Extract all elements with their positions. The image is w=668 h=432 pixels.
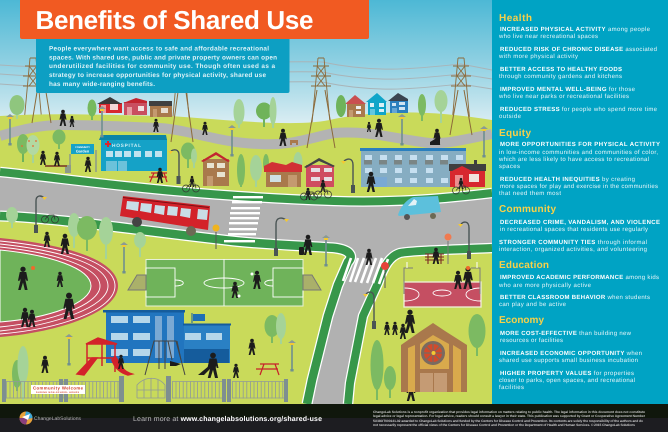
benefits: equity bbox=[498, 128, 660, 197]
community garden sign bbox=[45, 144, 96, 173]
benefits: health bbox=[498, 13, 658, 120]
benefits: economy: INCREASED ECONOMIC OPPORTUNITY when bbox=[500, 350, 642, 357]
benefits: economy: closer to parks, open spaces, and recreational bbox=[499, 377, 635, 384]
power lines and pylons bbox=[0, 58, 492, 138]
community welcome sign: DURING NON-SCHOOL HOURS bbox=[36, 391, 80, 394]
benefits: health: through community gardens and kitchens bbox=[499, 73, 622, 80]
benefits: equity: more spaces for play and exercise in the communities bbox=[500, 183, 658, 190]
benefits: economy: shared use supports small business incubation bbox=[499, 357, 638, 364]
fine print bbox=[373, 410, 646, 427]
community garden sign: Garden bbox=[76, 150, 90, 154]
benefits: economy: resources or facilities bbox=[500, 337, 563, 344]
website call to action: Learn more at www.changelabsolutions.org/shared-use bbox=[133, 415, 322, 423]
running track and field bbox=[0, 238, 118, 337]
benefits: education: can play and be active bbox=[499, 301, 567, 308]
house: brown with red roof bbox=[264, 162, 302, 187]
house: blue bbox=[388, 93, 408, 113]
walking path on the hill bbox=[0, 125, 492, 144]
balls and dog bbox=[31, 140, 470, 298]
picnic table near hospital bbox=[149, 173, 167, 182]
main road with side road bbox=[0, 172, 492, 404]
benefits: health: REDUCED RISK OF CHRONIC DISEASE associated bbox=[500, 46, 657, 53]
house: teal bbox=[366, 93, 387, 115]
rose window bbox=[421, 341, 445, 365]
intro text box bbox=[36, 39, 290, 93]
school bbox=[103, 310, 231, 363]
soccer field bbox=[128, 259, 321, 306]
community garden sign: COMMUNITY bbox=[75, 146, 90, 149]
benefits: health: REDUCED STRESS for people who spend more time bbox=[500, 106, 658, 113]
house: pink bbox=[304, 158, 335, 187]
benefits: education: who are more physically active bbox=[498, 282, 592, 289]
hospital sign: HOSPITAL bbox=[112, 143, 141, 149]
logo bbox=[20, 412, 82, 424]
fine print: not necessarily represent the official views of the Centers for Disease Control and Prevention or the Department of Health and Human Services. © 2015 ChangeLab Solutions bbox=[373, 423, 635, 427]
intro text box: has many wide-ranging benefits. bbox=[49, 81, 155, 88]
benefits: health: Health bbox=[499, 13, 532, 24]
benefits: equity: in low-income communities and communities of color, bbox=[499, 149, 658, 156]
house: red bbox=[97, 97, 122, 113]
benefits: health: with more physical activity bbox=[498, 53, 578, 60]
park bench bbox=[425, 254, 444, 264]
house: brown two-storey bbox=[201, 152, 230, 186]
benefits: community: in recreational spaces that residents use regularly bbox=[500, 226, 648, 233]
benefits: community: STRONGER COMMUNITY TIES through informal bbox=[499, 239, 647, 246]
trees bbox=[6, 90, 486, 401]
benefits: community: interaction, organized activities, and volunteering bbox=[499, 246, 647, 253]
benefits: education: IMPROVED ACADEMIC PERFORMANCE among kids bbox=[500, 274, 659, 281]
benefits: economy: facilities bbox=[499, 384, 524, 391]
logo: ChangeLabSolutions bbox=[34, 416, 82, 422]
benefits: health: BETTER ACCESS TO HEALTHY FOODS bbox=[500, 66, 622, 73]
fine print: ChangeLab Solutions is a nonprofit organization that provides legal information on matters relating to public health. The legal information in this document does not constitute bbox=[373, 410, 645, 414]
church bbox=[401, 323, 467, 392]
van bbox=[398, 196, 441, 220]
fine print: legal advice or legal representation. For legal advice, readers should consult a lawyer in their state. This publication was supported by Grant or Cooperative Agreement Number bbox=[373, 414, 646, 418]
benefits: economy: HIGHER PROPERTY VALUES for properties bbox=[500, 370, 634, 377]
basketball court bbox=[404, 262, 481, 307]
benefits: economy: MORE COST-EFFECTIVE than building new bbox=[500, 330, 632, 337]
soccer goals bbox=[128, 275, 321, 290]
flag bbox=[192, 313, 205, 323]
benefits side panel bbox=[492, 0, 668, 404]
benefits: community: DECREASED CRIME, VANDALISM, AND VIOLENCE bbox=[500, 219, 660, 226]
back hill houses bbox=[97, 93, 408, 117]
community welcome sign bbox=[31, 385, 85, 394]
benefits: equity: spaces bbox=[499, 164, 520, 170]
background: sky bbox=[0, 0, 492, 125]
green verge strips along the roads bbox=[0, 172, 492, 404]
benefits: health: outside bbox=[499, 113, 522, 120]
benefits: economy bbox=[499, 315, 642, 391]
benefits: health: IMPROVED MENTAL WELL-BEING for those bbox=[500, 86, 636, 93]
bus bbox=[120, 196, 210, 236]
house: brown right bbox=[345, 95, 366, 117]
benefits: education: BETTER CLASSROOM BEHAVIOR when students bbox=[500, 294, 650, 301]
picnic table bbox=[256, 364, 279, 375]
crosswalk on main road bbox=[224, 196, 263, 242]
title banner: Benefits of Shared Use bbox=[36, 5, 314, 35]
benefits: equity: that need them most bbox=[499, 190, 561, 197]
fence bbox=[2, 376, 288, 402]
benefits: health: who live near parks or recreational facilities bbox=[498, 93, 629, 100]
benefits: economy: Economy bbox=[499, 315, 544, 326]
house: pink bbox=[123, 98, 147, 115]
middle row houses bbox=[201, 148, 486, 187]
swing set bbox=[145, 341, 185, 375]
footer band bbox=[0, 404, 668, 432]
landscape: green hills bbox=[0, 112, 492, 404]
benefits: equity: REDUCED HEALTH INEQUITIES by creating bbox=[500, 176, 635, 183]
benefits: education bbox=[498, 260, 659, 308]
title banner bbox=[20, 0, 369, 39]
intro text box: strategy to increase opportunities for physical activity, shared use bbox=[49, 72, 266, 79]
pylon legs in foreground bbox=[32, 90, 472, 148]
benefits: education: Education bbox=[499, 260, 549, 271]
crosswalk on side road bbox=[343, 258, 388, 284]
playground structure bbox=[77, 338, 132, 375]
benefits: health: INCREASED PHYSICAL ACTIVITY among people bbox=[500, 26, 651, 33]
community welcome sign: Community Welcome bbox=[33, 386, 84, 390]
road signs bbox=[212, 224, 452, 288]
benefits: health: who live near recreational spaces bbox=[498, 33, 598, 40]
benefits: equity: Equity bbox=[499, 128, 531, 139]
benefits: community: Community bbox=[499, 204, 556, 215]
house: brown bbox=[149, 101, 172, 117]
fine print: 5U38OT000141-02 awarded to ChangeLab Solutions and funded by the Centers for Disease Control and Prevention. Its contents are solely the responsibility of the authors and do bbox=[373, 419, 643, 423]
hospital bbox=[99, 135, 167, 171]
benefits: community bbox=[499, 204, 660, 253]
intro text box: spaces. With shared use, public and private property owners can open bbox=[49, 54, 277, 62]
people silhouettes bbox=[18, 110, 473, 401]
apartment building bbox=[360, 148, 466, 187]
intro text box: People everywhere want access to safe and affordable recreational bbox=[49, 46, 269, 52]
street lamps bbox=[6, 106, 488, 372]
benefits: equity: MORE OPPORTUNITIES FOR PHYSICAL ACTIVITY bbox=[500, 141, 660, 148]
intro text box: underutilized facilities for community use. Though often used as a bbox=[49, 63, 275, 70]
benefits: equity: which are less likely to have access to recreational bbox=[498, 156, 649, 163]
house: red bbox=[449, 160, 486, 187]
